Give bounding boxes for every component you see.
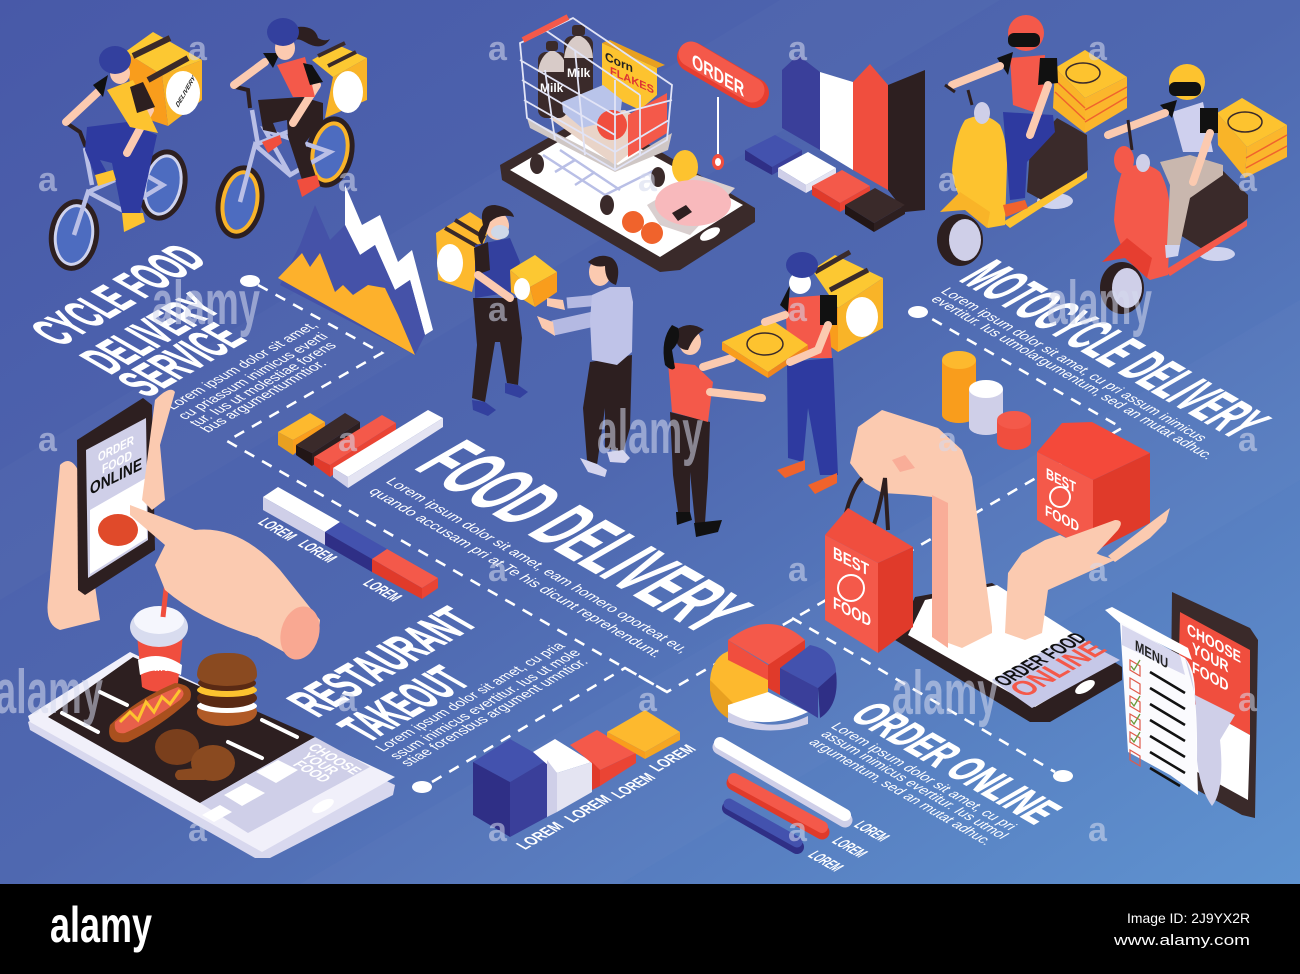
best food box: BEST: [1046, 466, 1076, 497]
text block: cycle paragraph: bus argumentumntior.: [197, 357, 331, 435]
watermarks: a: [1088, 551, 1108, 589]
heading: restaurant takeout: RESTAURANT: [275, 600, 490, 724]
heading: cycle food delivery service: DELIVERY: [68, 286, 233, 381]
hand holding phone: FOOD: [102, 448, 132, 477]
best food shopping bag: [825, 478, 913, 653]
best food shopping bag: FOOD: [833, 593, 871, 631]
menu phone and receipt: FOOD: [1192, 659, 1229, 696]
cube bar chart with labels: LOREM: [512, 819, 568, 852]
watermarks: a: [188, 30, 208, 68]
shopping cart on phone: Milk: [567, 66, 591, 80]
text block: food delivery paragraph: Lorem ipsum dolor sit amet, eam homero oporteat eu,: [382, 475, 693, 656]
watermarks: a: [1088, 811, 1108, 849]
tablet with food: [28, 652, 395, 858]
order sign: ORDER: [692, 50, 745, 102]
cyclist 1: DELIVERY: [175, 74, 197, 110]
cyclist 1: [44, 32, 202, 274]
heading: cycle food delivery service: [18, 237, 258, 404]
heading: cycle food delivery service: SERVICE: [105, 316, 258, 404]
watermarks: alamy: [1047, 269, 1152, 338]
long segmented bar with labels: LOREM: [254, 515, 301, 543]
phone with hands, order food online: ORDER FOOD: [988, 629, 1092, 690]
best food box: [1037, 422, 1170, 562]
shopping cart on phone: FLAKES: [610, 65, 654, 97]
watermarks: a: [38, 421, 58, 459]
text block: cycle paragraph: Lorem ipsum dolor sit amet,: [162, 319, 322, 412]
watermarks: a: [788, 291, 808, 329]
watermarks: a: [938, 161, 958, 199]
footer bar: www.alamy.com: [1113, 932, 1250, 949]
text block: order online paragraph: argumentum, sed an mutat adhuc.: [805, 736, 997, 848]
best food box: FOOD: [1045, 503, 1079, 536]
text block: restaurant paragraph: ssum inimicus evertitur. Ius ut mole: [386, 647, 585, 762]
isometric column chart: [745, 55, 925, 232]
heading: restaurant takeout: [275, 600, 490, 749]
hand holding phone: [48, 390, 325, 664]
text block: cycle paragraph: cu priassum inimicus everti: [174, 330, 332, 422]
dashed connector lines: [227, 275, 1122, 793]
long segmented bar with labels: LOREM: [359, 576, 406, 604]
watermarks: a: [638, 161, 658, 199]
watermarks: a: [188, 811, 208, 849]
text block: motorcycle paragraph: Lorem ipsum dolor sit amet, cu pri assum inimicus: [937, 285, 1211, 444]
stacked bars small chart: [278, 410, 443, 488]
menu phone and receipt: MENU: [1135, 637, 1168, 673]
rounded bars chart with labels: LOREM: [804, 848, 848, 874]
watermarks: alamy: [892, 659, 998, 728]
cube bar chart with labels: [473, 710, 700, 852]
footer bar: [0, 884, 1300, 974]
watermarks: a: [488, 30, 508, 68]
watermarks: a: [488, 291, 508, 329]
people: woman with mask handing box: [436, 205, 557, 416]
cyclist 2: [210, 18, 367, 243]
watermarks: a: [1238, 161, 1258, 199]
people: delivery man with pizza and box: [722, 252, 883, 494]
text block: motorcycle paragraph: evertitur. Ius utmolargumentum, sed an mutat adhuc.: [927, 293, 1218, 462]
cube bar chart with labels: LOREM: [560, 792, 616, 825]
yellow scooter with rider: [937, 15, 1127, 266]
tablet with food: CHOOSE: [304, 741, 365, 777]
shopping cart on phone: Corn: [605, 50, 633, 75]
watermarks: a: [1238, 681, 1258, 719]
menu phone and receipt: [1105, 592, 1258, 818]
watermarks: alamy: [152, 269, 260, 338]
watermarks: a: [938, 421, 958, 459]
text block: restaurant paragraph: stiae forensbus argument umntior.: [397, 656, 592, 769]
red scooter with rider: [1100, 64, 1287, 314]
watermarks: a: [338, 161, 358, 199]
watermarks: a: [488, 551, 508, 589]
text block: cycle paragraph: tur. Ius ut molestiae forens: [186, 339, 341, 429]
footer bar: Image ID: 2J9YX2R: [1127, 910, 1250, 926]
watermarks: a: [488, 811, 508, 849]
heading: order online: ORDER ONLINE: [838, 696, 1071, 831]
cube bar chart with labels: LOREM: [645, 742, 700, 774]
watermarks: a: [1238, 421, 1258, 459]
watermarks: a: [788, 811, 808, 849]
phone with hands, order food online: ONLINE: [1002, 637, 1114, 702]
heading: cycle food delivery service: CYCLE FOOD: [18, 237, 219, 353]
heading: food delivery: FOOD DELIVERY: [397, 429, 770, 645]
menu phone and receipt: CHOOSE: [1187, 621, 1241, 667]
long segmented bar with labels: [254, 487, 438, 604]
shopping cart on phone: Milk: [540, 81, 564, 95]
hand holding phone: ONLINE: [90, 454, 142, 499]
text block: order online paragraph: assum inimicus evertitur. Ius utmol: [817, 728, 1012, 842]
watermarks: a: [338, 421, 358, 459]
watermarks: alamy: [0, 658, 103, 727]
watermarks: a: [638, 681, 658, 719]
food: drink, hotdog, chicken, burger: [109, 580, 257, 781]
text block: order online paragraph: Lorem ipsum dolor sit amet, cu pri: [827, 720, 1021, 833]
watermarks: a: [1088, 30, 1108, 68]
best food shopping bag: BEST: [833, 543, 869, 580]
order sign: [691, 50, 754, 170]
cube bar chart with labels: LOREM: [607, 770, 660, 801]
watermarks: a: [788, 551, 808, 589]
mountain chart: [278, 185, 433, 355]
tablet with food: YOUR: [297, 750, 343, 777]
menu phone and receipt: YOUR: [1192, 640, 1229, 677]
text block: food delivery paragraph: quando accusam pri at Te his dicunt reprehendunt.: [365, 485, 667, 660]
phone with hands, order food online: [850, 410, 1122, 722]
heading: restaurant takeout: TAKEOUT: [326, 659, 482, 749]
watermarks: alamy: [597, 398, 703, 467]
shopping cart on phone: [500, 17, 755, 272]
people: customer man: [537, 256, 633, 477]
watermarks: a: [788, 30, 808, 68]
cylinder chart: [942, 351, 1031, 450]
food: drink, hotdog, chicken, burger: DRINK: [141, 662, 176, 674]
watermarks: a: [38, 161, 58, 199]
long segmented bar with labels: LOREM: [294, 537, 341, 565]
rounded bars chart with labels: LOREM: [828, 834, 872, 860]
hand holding phone: ORDER: [98, 433, 134, 465]
rounded bars chart with labels: [720, 743, 894, 874]
rounded bars chart with labels: LOREM: [850, 818, 894, 844]
people: woman receiving pizza: [664, 325, 762, 537]
text block: restaurant paragraph: Lorem ipsum dolor sit amet, cu pria: [372, 640, 570, 754]
tablet with food: FOOD: [289, 758, 335, 785]
watermarks: a: [338, 681, 358, 719]
pie chart: [710, 624, 837, 731]
footer bar: alamy: [50, 897, 152, 953]
